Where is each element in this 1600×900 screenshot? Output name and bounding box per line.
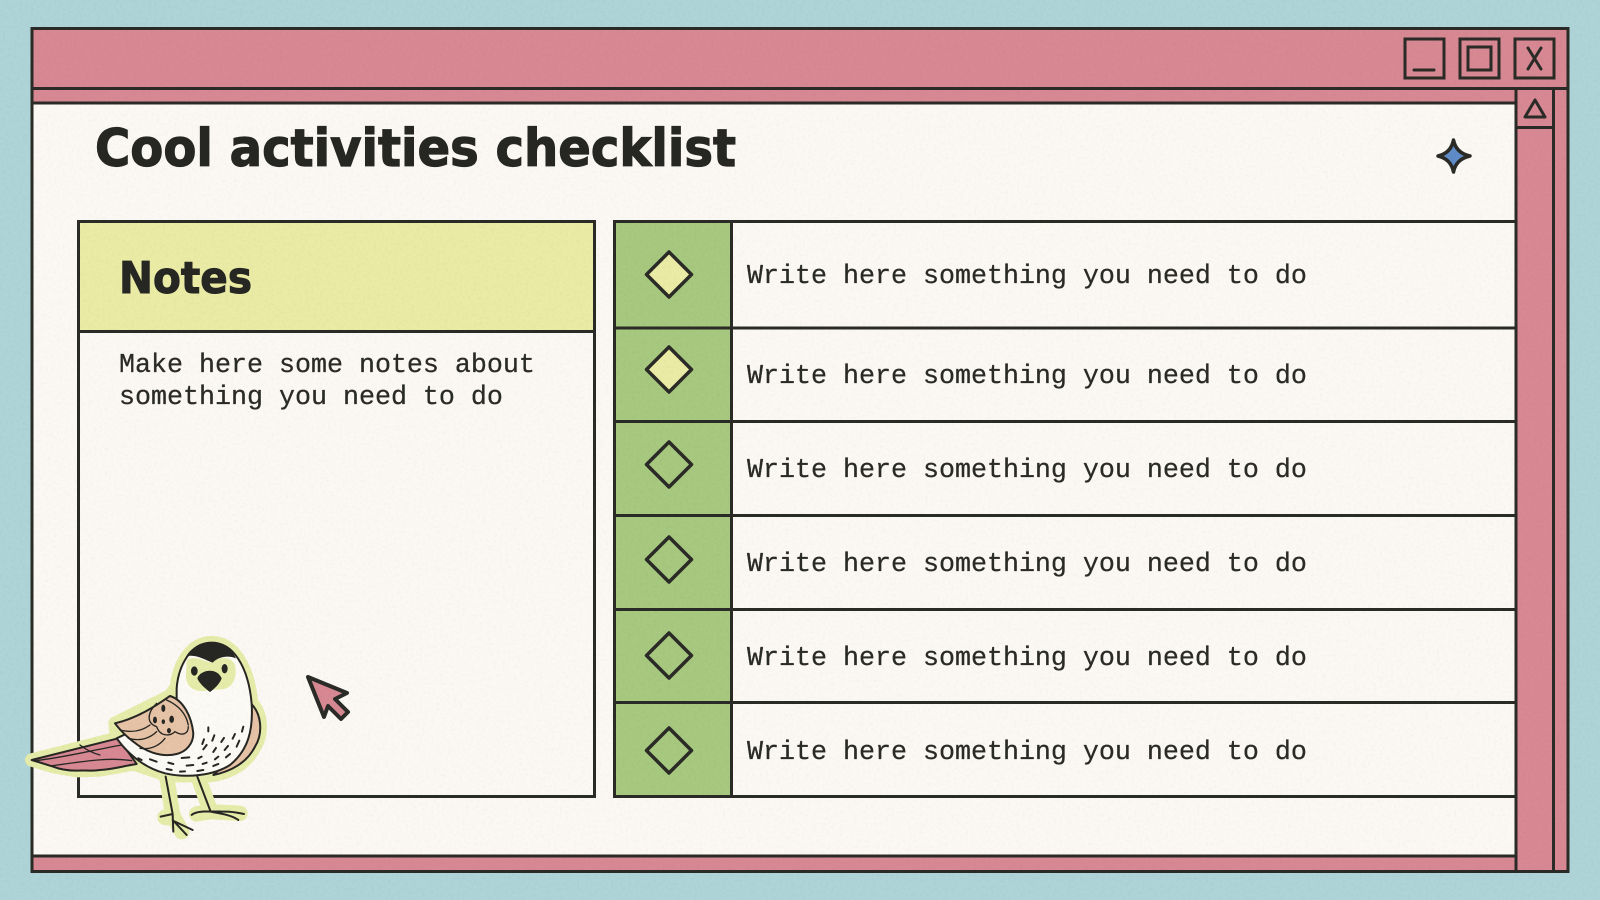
item 1: Write here something you need to do (747, 262, 1307, 292)
item 6 (646, 728, 1307, 773)
item 5 (646, 633, 1307, 678)
face mask (186, 658, 236, 691)
notes heading: Notes (119, 253, 252, 304)
icon: sparkle star (1438, 140, 1470, 172)
bird sticker halo (32, 643, 260, 832)
body (117, 643, 252, 776)
notes text: Make here some notes about (119, 351, 535, 381)
item 3 (646, 442, 1307, 487)
item 2: Write here something you need to do (747, 362, 1307, 392)
item 5: Write here something you need to do (747, 644, 1307, 674)
icon: scroll up arrow (1525, 100, 1545, 117)
wing feathers (120, 700, 188, 749)
checkbox column (614, 221, 732, 796)
head cap (186, 643, 236, 663)
notes text: something you need to do (119, 383, 503, 413)
item 6: Write here something you need to do (747, 738, 1307, 768)
item 4: Write here something you need to do (747, 550, 1307, 580)
window buttons (1405, 39, 1554, 117)
illustration: bird (32, 643, 260, 835)
title: Cool activities checklist (95, 119, 736, 179)
legs and feet (161, 777, 244, 835)
item 3: Write here something you need to do (747, 456, 1307, 486)
eyes and beak (191, 664, 228, 692)
item 4 (646, 537, 1307, 582)
notes header (78, 222, 594, 332)
icon: close button (1515, 39, 1554, 78)
tail (32, 738, 137, 771)
item 2 (646, 347, 1307, 392)
panel: checklist (613, 221, 1516, 798)
front wing (115, 696, 193, 755)
wing spots (153, 705, 174, 733)
back wing (213, 703, 260, 775)
icon: minimize button (1405, 39, 1444, 78)
item 1 (646, 252, 1307, 297)
chest markings (138, 727, 243, 772)
icon: maximize button (1460, 39, 1499, 78)
panel: notes (78, 222, 594, 796)
icon: cursor arrow (308, 677, 348, 719)
